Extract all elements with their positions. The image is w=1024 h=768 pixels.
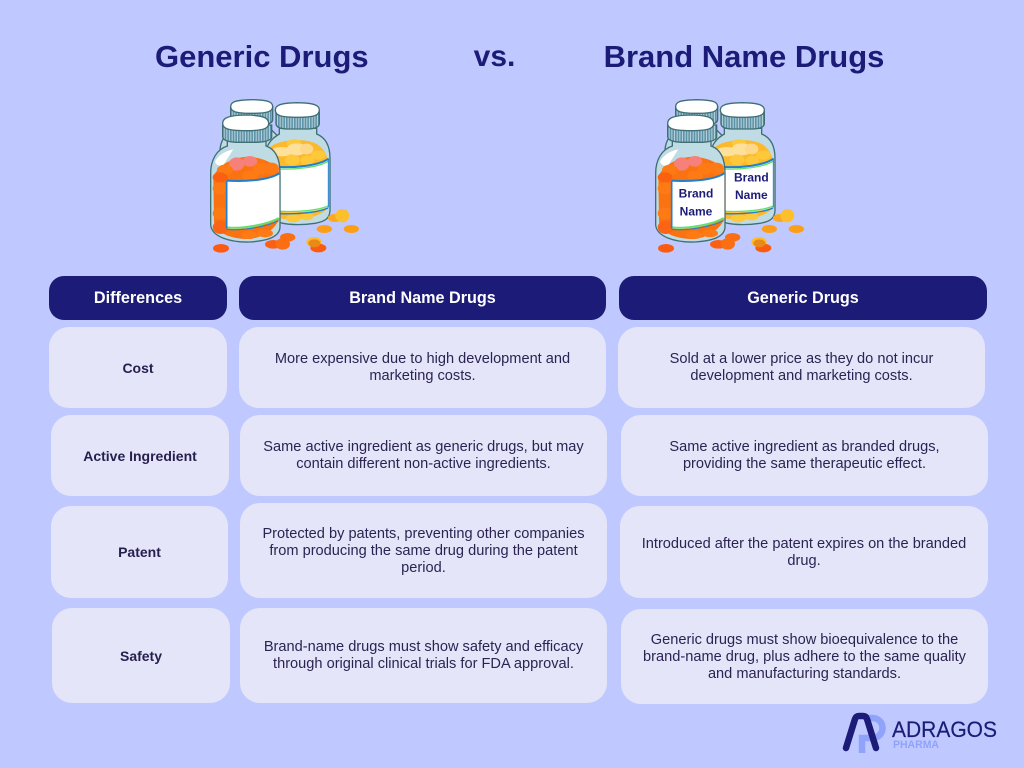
active ingredient: generic xyxy=(621,415,988,496)
cost: brand name xyxy=(239,327,606,408)
row label: Active Ingredient xyxy=(51,415,229,496)
patent: generic: Introduced after the patent expires on the branded xyxy=(642,536,966,552)
row label: Active Ingredient: Active Ingredient xyxy=(83,448,197,464)
bottle label text: Brand xyxy=(734,170,768,184)
icon: generic pill bottles xyxy=(210,99,359,253)
row label: Safety: Safety xyxy=(120,648,162,664)
icon: brand name pill bottles xyxy=(655,99,804,253)
row label: Patent: Patent xyxy=(118,544,161,560)
table header: Differences: Differences xyxy=(94,288,182,306)
bottle label text: Name xyxy=(679,204,712,218)
row label: Safety xyxy=(52,608,230,703)
table header: Brand Name Drugs xyxy=(239,276,606,320)
table header: Generic Drugs xyxy=(619,276,987,320)
title: Generic Drugs: Generic Drugs xyxy=(155,39,369,74)
cost: generic xyxy=(618,327,985,408)
logo mark xyxy=(846,716,882,753)
title: vs.: vs. xyxy=(474,40,515,73)
table header: Differences xyxy=(49,276,227,320)
active ingredient: generic: Same active ingredient as branded drugs, xyxy=(669,439,940,455)
cost: generic: development and marketing costs. xyxy=(690,368,913,384)
active ingredient: generic: providing the same therapeutic effect. xyxy=(683,456,926,472)
patent: generic: drug. xyxy=(787,552,821,568)
patent: generic xyxy=(620,506,988,598)
row label: Cost: Cost xyxy=(122,360,154,376)
bottle label text xyxy=(678,170,768,218)
logo subtitle: PHARMA xyxy=(893,739,939,751)
bottle label text: Name xyxy=(735,188,768,202)
logo: Adragos Pharma xyxy=(842,712,997,753)
row label: Patent xyxy=(51,506,228,598)
logo wordmark: ADRAGOS xyxy=(892,717,997,742)
active ingredient: brand name: contain different non-active ingredients. xyxy=(296,456,551,472)
cost: brand name: marketing costs. xyxy=(369,368,476,384)
safety: generic: brand-name drug, plus adhere to the same quality xyxy=(643,648,966,664)
table header: Generic Drugs: Generic Drugs xyxy=(747,288,859,306)
patent: brand name xyxy=(240,503,607,598)
title: Brand Name Drugs: Brand Name Drugs xyxy=(604,39,884,74)
patent: brand name: period. xyxy=(401,560,446,576)
safety: brand name xyxy=(240,608,607,703)
active ingredient: brand name: Same active ingredient as generic drugs, but may xyxy=(263,439,584,455)
bottle label text: Brand xyxy=(678,186,713,200)
safety: generic: Generic drugs must show bioequivalence to the xyxy=(651,632,958,648)
cost: generic: Sold at a lower price as they do not incur xyxy=(670,351,933,367)
patent: brand name: Protected by patents, preventing other companies xyxy=(262,526,585,542)
active ingredient: brand name xyxy=(240,415,607,496)
safety: brand name: through original clinical trials for FDA approval. xyxy=(273,656,574,672)
cost: brand name: More expensive due to high development and xyxy=(275,351,570,367)
safety: brand name: Brand-name drugs must show safety and efficacy xyxy=(264,639,583,655)
table header: Brand Name Drugs: Brand Name Drugs xyxy=(349,288,496,306)
patent: brand name: from producing the same drug during the patent xyxy=(269,542,578,558)
safety: generic: and manufacturing standards. xyxy=(708,666,901,682)
row label: Cost xyxy=(49,327,227,408)
safety: generic xyxy=(621,609,988,704)
